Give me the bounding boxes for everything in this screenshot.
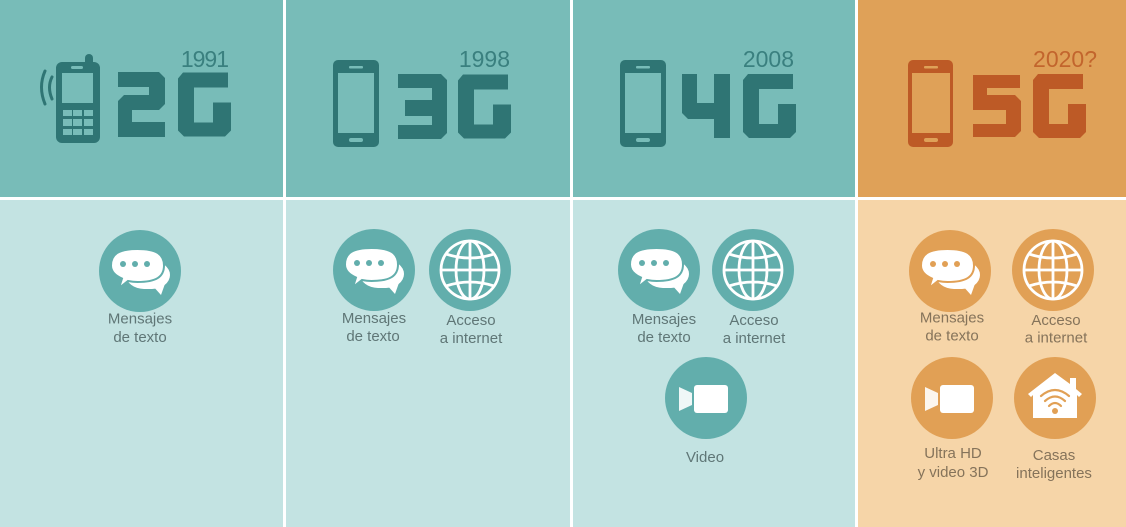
panel: 2G header	[0, 0, 283, 197]
feature: 4G text messages: de texto	[637, 329, 691, 346]
panel: 3G body	[286, 200, 570, 527]
year: 2020?: 2020?	[1033, 46, 1097, 72]
feature: 5G smart homes	[1014, 357, 1096, 482]
heading: 3G	[398, 74, 511, 139]
year: 1998: 1998	[459, 46, 510, 72]
heading: 4G	[682, 74, 796, 138]
icon: 2G feature phone	[42, 54, 100, 143]
feature: 4G text messages: Mensajes	[632, 311, 696, 328]
feature: 3G internet access	[429, 229, 511, 347]
panel: 3G header	[286, 0, 570, 197]
feature: 5G internet access: Acceso	[1031, 312, 1081, 329]
year: 2008: 2008	[743, 46, 794, 72]
feature: 3G internet access: a internet	[440, 330, 503, 347]
feature: 5G ultra HD and 3D video	[911, 357, 993, 481]
feature: 5G text messages: Mensajes	[920, 310, 984, 326]
feature: 3G text messages	[333, 229, 415, 345]
icon: 5G smartphone	[908, 60, 953, 147]
feature: 3G text messages: de texto	[346, 328, 400, 345]
feature: 4G internet access: Acceso	[729, 312, 779, 329]
feature: 5G ultra HD and 3D video: Ultra HD	[924, 445, 982, 462]
feature: 2G text messages: Mensajes	[108, 310, 172, 328]
panel: 2G body	[0, 200, 283, 527]
feature: 2G text messages: de texto	[113, 329, 167, 346]
feature: 5G ultra HD and 3D video: y video 3D	[918, 464, 989, 481]
feature: 4G video: Video	[686, 449, 724, 466]
feature: 5G internet access: a internet	[1025, 330, 1088, 346]
feature: 5G internet access	[1012, 229, 1094, 346]
year: 1991: 1991	[181, 46, 228, 72]
panel: 5G body	[858, 200, 1126, 527]
feature: 4G internet access: a internet	[723, 330, 786, 347]
heading: 2G	[118, 72, 231, 137]
feature: 4G text messages	[618, 229, 700, 346]
heading: 5G	[973, 74, 1086, 138]
panel: 4G body	[573, 200, 855, 527]
feature: 5G text messages	[909, 230, 991, 344]
feature: 4G video	[665, 357, 747, 466]
feature: 5G text messages: de texto	[925, 328, 979, 344]
icon: 3G smartphone	[333, 60, 379, 147]
panel: 5G header	[858, 0, 1126, 197]
panel: 4G header	[573, 0, 855, 197]
feature: 3G internet access: Acceso	[446, 312, 496, 329]
feature: 5G smart homes: inteligentes	[1016, 465, 1092, 482]
feature: 3G text messages: Mensajes	[342, 310, 406, 327]
feature: 2G text messages	[99, 230, 181, 346]
icon: 4G smartphone	[620, 60, 666, 147]
feature: 5G smart homes: Casas	[1033, 447, 1075, 464]
feature: 4G internet access	[712, 229, 794, 347]
